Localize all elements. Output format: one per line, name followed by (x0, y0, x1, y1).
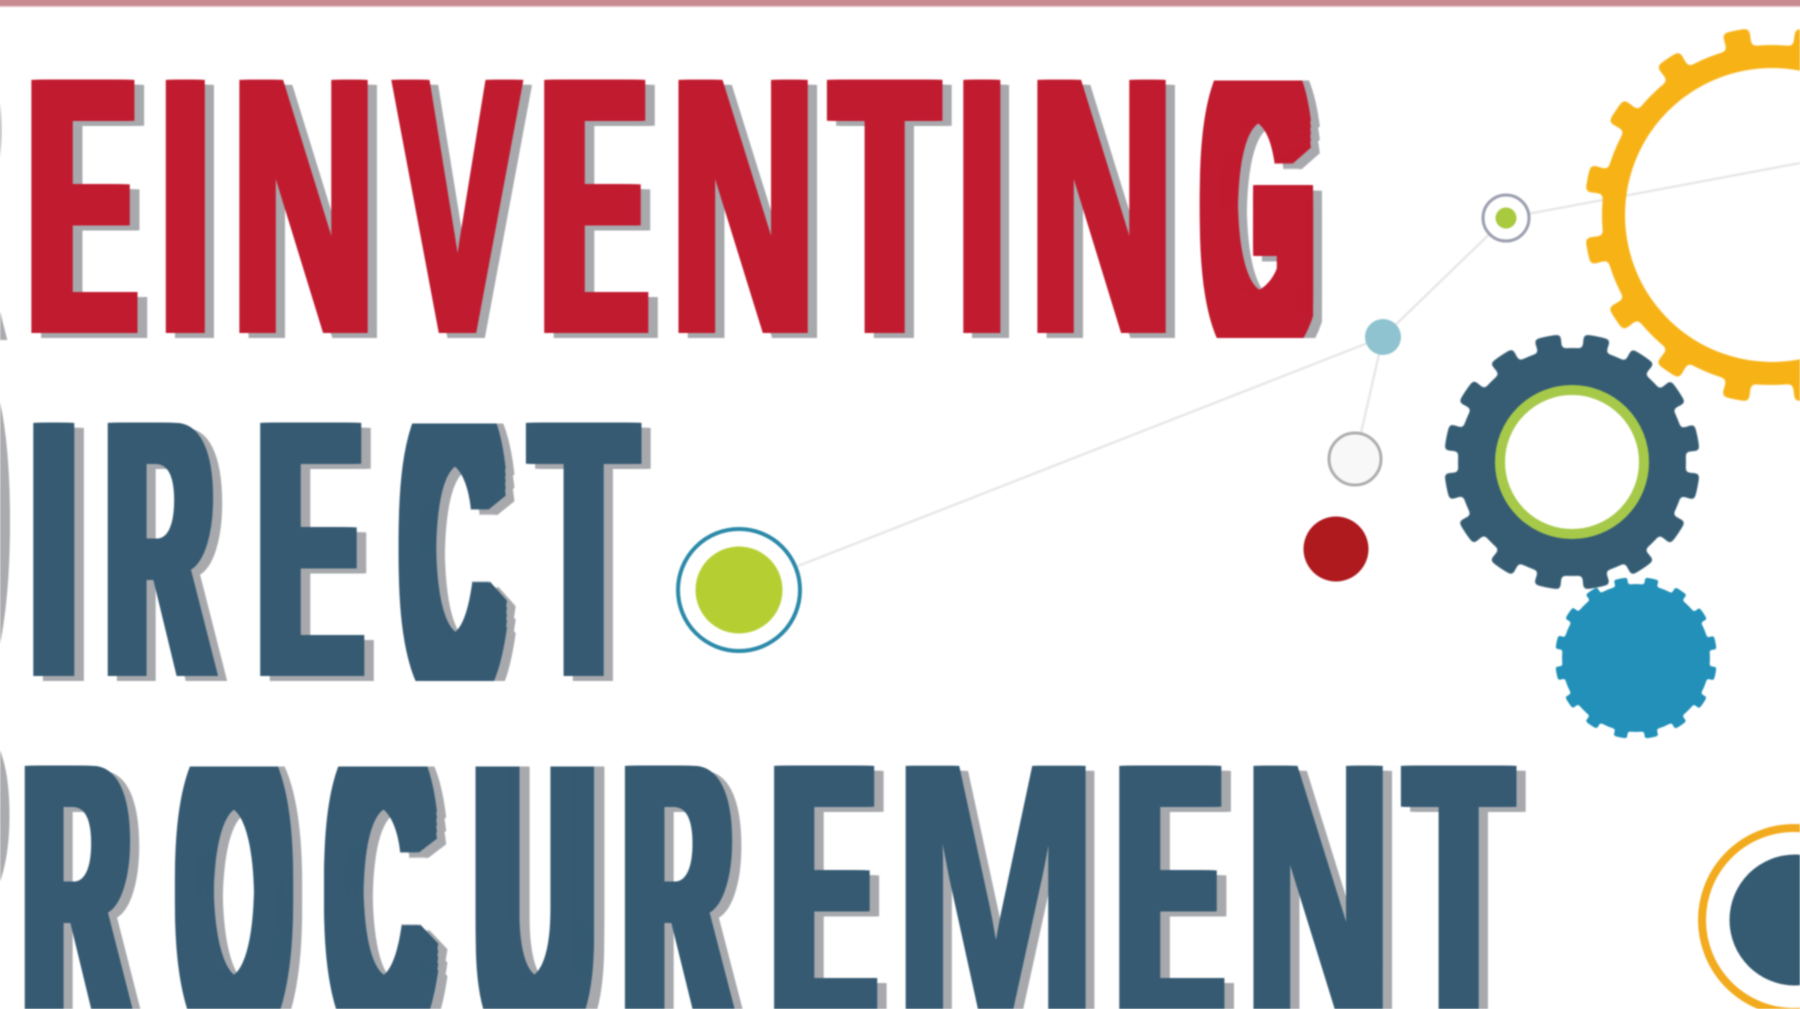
heading line: REINVENTING (0, 0, 1323, 432)
heading line: DIRECT: C (392, 318, 493, 778)
heading line: DIRECT: I (23, 342, 66, 754)
node: small green dot with grey ring (1483, 195, 1529, 241)
node: dark circle with orange ring (1702, 828, 1800, 1009)
heading line: REINVENTING: I (954, 0, 993, 410)
node: light blue dot (1365, 319, 1401, 355)
heading line: REINVENTING: E (534, 0, 635, 410)
node: red dot (1304, 516, 1368, 582)
title (0, 78, 1526, 1009)
heading line: REINVENTING: N (226, 0, 371, 410)
heading line: REINVENTING: I (156, 0, 196, 410)
heading line: REINVENTING: V (390, 0, 515, 410)
connector lines between nodes (798, 163, 1800, 566)
heading line: PROCUREMENT (0, 626, 1526, 1009)
node: large green dot with blue ring (678, 529, 800, 651)
heading line: DIRECT (0, 342, 652, 754)
heading line: REINVENTING: T (825, 0, 929, 410)
icon: yellow gear (1594, 37, 1800, 393)
top border band (0, 0, 1800, 8)
heading line: DIRECT: E (250, 342, 351, 754)
node: hollow grey ring (1329, 433, 1381, 485)
icon: dark blue gear with green ring (1453, 343, 1691, 581)
icon: blue gear (1560, 582, 1712, 734)
heading line: REINVENTING: N (665, 0, 811, 410)
heading line: REINVENTING: E (21, 0, 124, 410)
heading line: DIRECT: T (524, 342, 628, 754)
heading line: DIRECT: R (98, 342, 204, 754)
heading line: REINVENTING: N (1024, 0, 1169, 410)
